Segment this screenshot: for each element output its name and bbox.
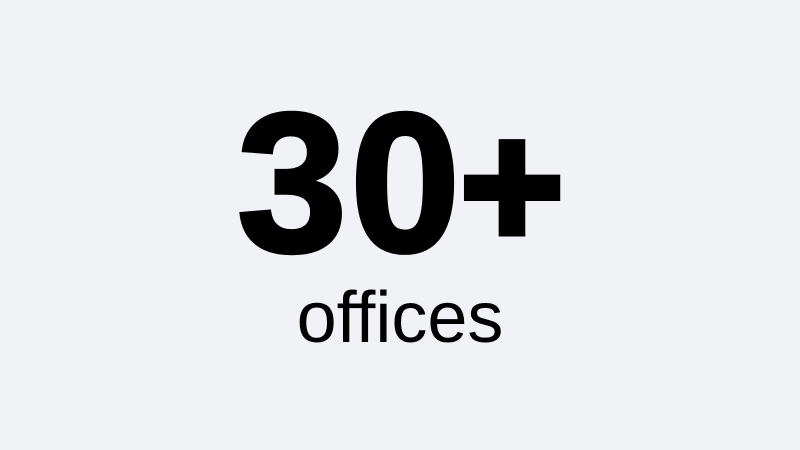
label: offices: offices bbox=[297, 278, 503, 358]
big number: 30+: + bbox=[460, 86, 564, 285]
big number: 30+: 30 bbox=[237, 72, 463, 293]
big number: 30+ bbox=[237, 72, 564, 293]
